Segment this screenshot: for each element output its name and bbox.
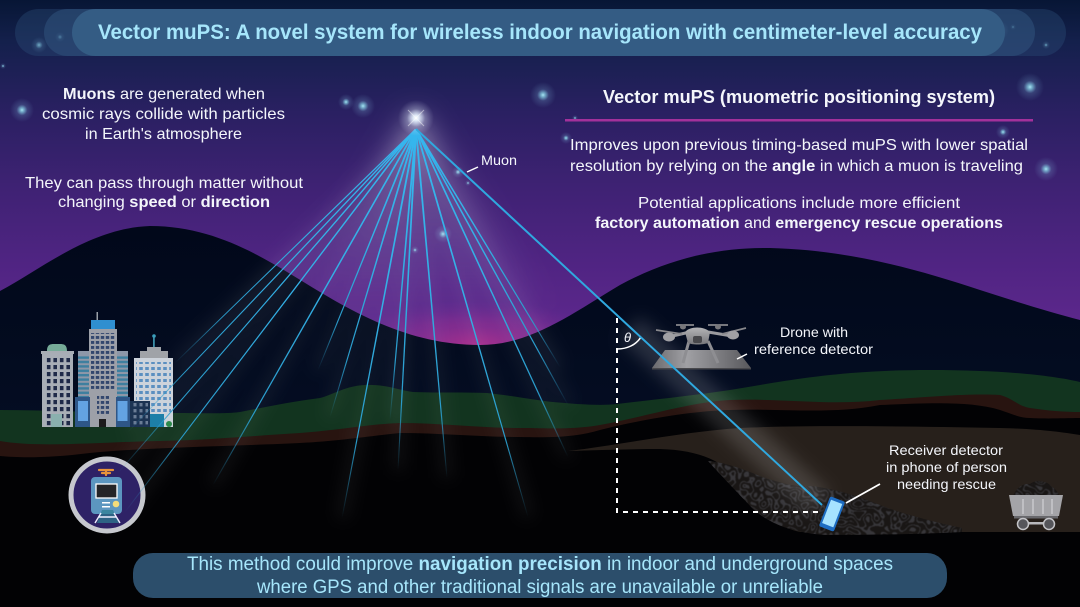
center tower: [89, 312, 117, 427]
buildings: [41, 312, 173, 427]
title banner: [15, 9, 1066, 56]
bedrock: [0, 403, 1080, 607]
label: theta: θ: [624, 330, 631, 345]
soil band: [0, 394, 1080, 461]
icon: mine cart: [1009, 481, 1063, 530]
text block: muons: [25, 86, 304, 211]
muon glow cone: [285, 112, 550, 310]
label: muon: Muon: [481, 153, 517, 168]
pantograph: [99, 470, 113, 475]
detector plate: [652, 350, 751, 368]
title: Vector muPS: A novel system for wireless indoor navigation with centimeter-level accuracy: [98, 20, 982, 44]
background: night sky: [0, 0, 1080, 420]
drone body: [685, 328, 710, 344]
icon: phone receiver detector: [819, 496, 845, 532]
label: drone: [737, 325, 874, 359]
main muon ray to phone: [416, 129, 822, 505]
label: drone: Drone with: [780, 325, 848, 340]
heading: Vector muPS (muometric positioning system): [603, 87, 995, 107]
text block: vector muPS: factory automation and emergency rescue operations: [595, 215, 1003, 232]
rock pile: [708, 461, 962, 535]
right building: [134, 334, 173, 427]
center tower wings: [78, 351, 128, 401]
label: receiver: in phone of person: [886, 460, 1007, 475]
text block: vector muPS: Improves upon previous timing-based muPS with lower spatial: [570, 137, 1028, 154]
icon: train in circle: [71, 459, 143, 531]
underground cavern: [568, 426, 1080, 532]
text block: vector muPS: [565, 87, 1033, 232]
conclusion banner: [133, 553, 947, 598]
label: receiver: [846, 443, 1007, 503]
label: muon: [467, 153, 517, 172]
train body: [91, 477, 122, 514]
label: receiver: needing rescue: [897, 477, 996, 492]
label: receiver: Receiver detector: [889, 443, 1004, 458]
banner pills: [15, 9, 1066, 56]
conclusion banner: where GPS and other traditional signals are unavailable or unreliable: [256, 577, 823, 598]
drone legs: [683, 341, 718, 363]
dark hills: [0, 226, 1080, 420]
small dark building: [130, 401, 150, 427]
label: drone: reference detector: [754, 342, 874, 357]
icon: drone with detector plate: [652, 324, 751, 370]
text block: muons: in Earth's atmosphere: [85, 126, 242, 143]
cosmic ray collision star: [398, 100, 434, 136]
left building: [41, 344, 74, 427]
lower blue wings: [75, 397, 130, 427]
drone arms: [668, 332, 732, 337]
angle dashed guide: [617, 318, 822, 512]
text block: muons: changing speed or direction: [58, 194, 270, 211]
grass band: [0, 370, 1080, 450]
stars: [0, 21, 1058, 254]
text block: vector muPS: Potential applications include more efficient: [638, 195, 961, 212]
ray glow: [118, 129, 820, 518]
conclusion banner: This method could improve navigation precision in indoor and underground spaces: [187, 554, 893, 575]
ground layers: [0, 370, 1080, 607]
text block: vector muPS: resolution by relying on the angle in which a muon is traveling: [570, 158, 1023, 175]
muon rays: [117, 129, 569, 518]
text block: muons: Muons are generated when: [63, 86, 265, 103]
text block: muons: cosmic rays collide with particles: [42, 106, 285, 123]
text block: muons: They can pass through matter without: [25, 175, 304, 192]
drone rotors: [656, 325, 746, 334]
